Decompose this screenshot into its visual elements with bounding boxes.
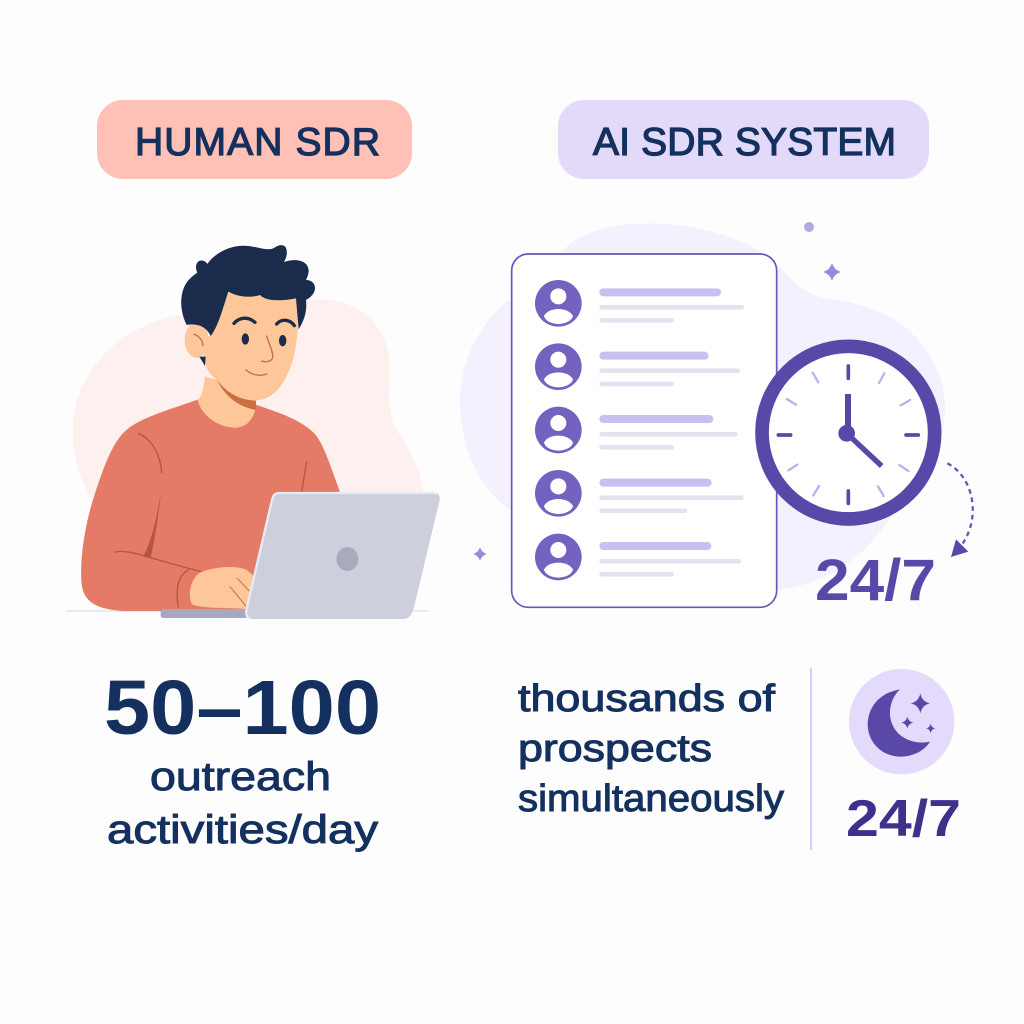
- prospect row 2: [535, 343, 740, 390]
- panel: AI SDR heading pill: AI SDR SYSTEM: [593, 121, 896, 164]
- icon: clock: [762, 346, 935, 519]
- label: always-on 24/7: 24/7: [846, 790, 961, 848]
- arrow: dashed curve to 24/7: [947, 463, 973, 557]
- prospect row 1: [535, 280, 744, 327]
- panel: human SDR heading pill: [97, 100, 412, 179]
- stat: human outreach volume: outreach: [150, 755, 331, 799]
- decoration: dot and sparkles: [473, 222, 841, 561]
- stat: AI prospect volume: thousands of: [518, 678, 776, 720]
- stat: AI prospect volume: simultaneously: [518, 778, 784, 820]
- panel: AI SDR heading pill: [558, 100, 929, 179]
- label: clock 24/7: 24/7: [815, 548, 936, 613]
- panel: human SDR heading pill: HUMAN SDR: [135, 121, 380, 164]
- prospect row 5: [535, 534, 741, 580]
- stat: AI prospect volume: prospects: [518, 728, 712, 770]
- prospect row 3: [535, 407, 738, 453]
- illustration: AI prospect list with clock: [460, 223, 973, 607]
- illustration: person at laptop: [67, 245, 440, 619]
- prospect row 4: [535, 470, 744, 517]
- stat: human outreach volume: 50–100: [104, 665, 381, 751]
- stat: human outreach volume: activities/day: [107, 808, 378, 852]
- stat: AI prospect volume: [518, 678, 784, 820]
- stat: human outreach volume: [104, 665, 381, 852]
- icon: moon and stars: [849, 669, 954, 774]
